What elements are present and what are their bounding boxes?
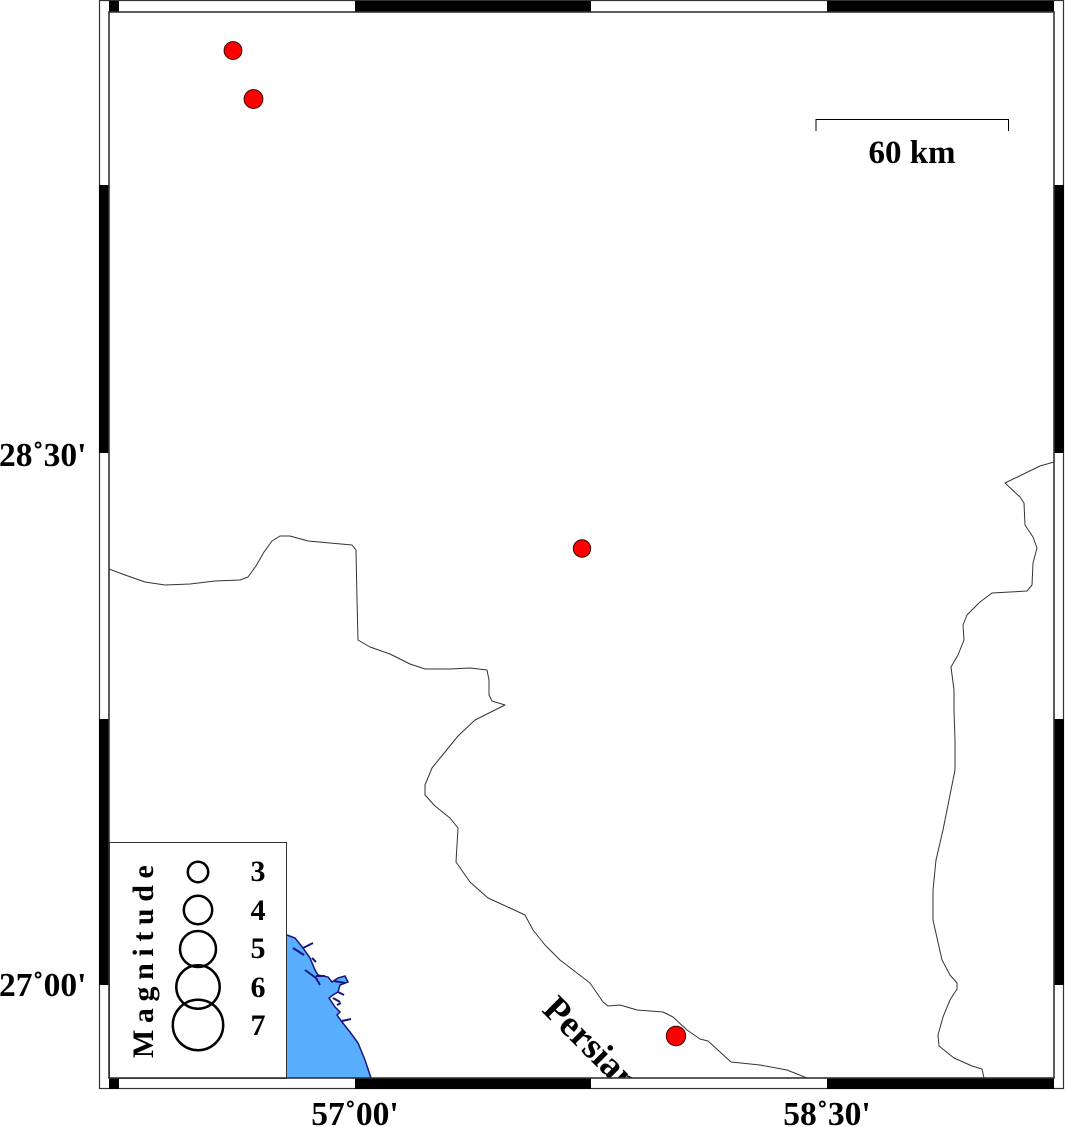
- legend: magnitude: 5: [250, 932, 266, 965]
- sea: Persian Gulf: [287, 935, 371, 1078]
- scale bar: 60 km: [868, 135, 956, 171]
- axis label: 28°30': 28˚30': [0, 437, 86, 474]
- scale bar: [816, 120, 1008, 171]
- top ticks: [109, 1, 1054, 12]
- eastern boundary line: [933, 462, 1054, 1078]
- right ticks: [1054, 185, 1064, 985]
- earthquake markers: [224, 42, 686, 1046]
- legend: magnitude: [110, 842, 286, 1078]
- left ticks: [99, 185, 109, 985]
- legend: magnitude: 7: [250, 1009, 266, 1042]
- legend: magnitude: 6: [250, 971, 266, 1004]
- legend: magnitude: Magnitude: [127, 859, 160, 1058]
- legend: magnitude: 4: [250, 894, 266, 927]
- bottom ticks: [109, 1078, 1054, 1089]
- legend: magnitude: 3: [250, 855, 266, 888]
- axis label: 27°00': 27˚00': [0, 967, 86, 1004]
- western boundary line: [109, 536, 807, 1078]
